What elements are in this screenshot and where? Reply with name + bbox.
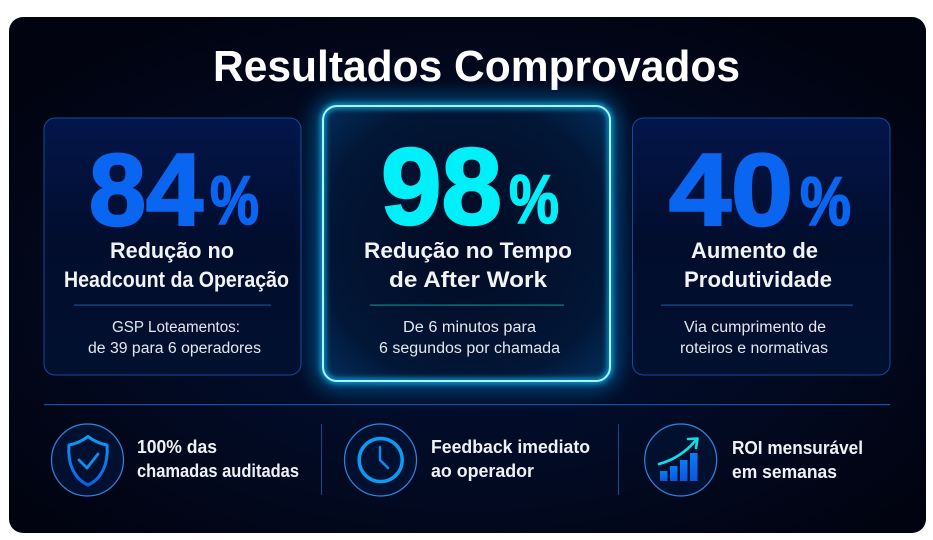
stat: 98% <box>381 126 559 248</box>
panel: 98% after work (highlighted) <box>323 106 610 381</box>
stat: 84%: 84 <box>89 133 203 247</box>
benefit: measurable ROI <box>645 424 863 496</box>
stat: 40% <box>669 133 851 247</box>
icon: clock <box>344 424 416 496</box>
stat: 84% <box>89 133 259 247</box>
text: audited calls: 100% das <box>137 437 217 457</box>
detail: productivity: roteiros e normativas <box>680 340 828 357</box>
detail: headcount: de 39 para 6 operadores <box>88 340 261 357</box>
icon: growth chart <box>645 424 717 496</box>
detail: after work <box>379 319 560 357</box>
stat: 40%: % <box>800 163 851 240</box>
label: headcount: Redução no <box>110 238 234 263</box>
panel: 84% headcount <box>44 118 301 375</box>
stat: 40%: 40 <box>669 133 793 247</box>
title: Resultados Comprovados <box>213 42 740 91</box>
label: productivity: Produtividade <box>684 267 832 292</box>
text: immediate feedback: ao operador <box>431 461 534 481</box>
label: headcount: Headcount da Operação <box>64 267 289 292</box>
text: measurable ROI <box>732 438 863 482</box>
text: measurable ROI: ROI mensurável <box>732 438 863 458</box>
detail: after work: De 6 minutos para <box>403 319 536 336</box>
detail: productivity <box>680 319 828 357</box>
label: after work <box>364 238 572 292</box>
label: productivity: Aumento de <box>691 238 818 263</box>
detail: productivity: Via cumprimento de <box>684 319 826 336</box>
detail: after work: 6 segundos por chamada <box>379 340 560 357</box>
benefit: audited calls <box>52 424 299 496</box>
stat: 98%: 98 <box>381 126 502 248</box>
label: productivity <box>684 238 832 292</box>
label: after work: Redução no Tempo <box>364 238 572 263</box>
text: immediate feedback: Feedback imediato <box>431 437 590 457</box>
label: after work: de After Work <box>389 267 548 292</box>
text: audited calls: chamadas auditadas <box>137 461 299 481</box>
benefit: immediate feedback <box>344 424 590 496</box>
label: headcount <box>64 238 289 292</box>
detail: headcount <box>88 319 261 357</box>
panel: 40% productivity <box>632 118 890 375</box>
text: immediate feedback <box>431 437 590 481</box>
icon: shield with check <box>52 424 124 496</box>
text: audited calls <box>137 437 299 481</box>
stat: 98%: % <box>509 161 559 238</box>
text: measurable ROI: em semanas <box>732 462 837 482</box>
detail: headcount: GSP Loteamentos: <box>112 319 240 336</box>
stat: 84%: % <box>210 162 259 239</box>
